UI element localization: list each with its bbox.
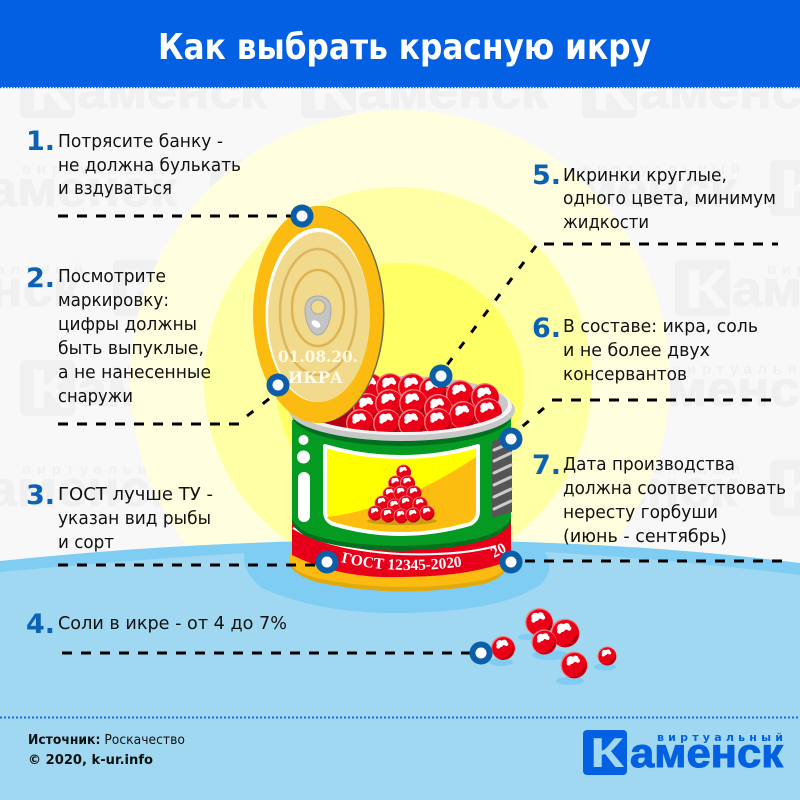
logo: аменск [630, 730, 783, 776]
source credit: Источник: Роскачество [28, 733, 185, 748]
callout 5: одного цвета, минимум [563, 188, 776, 209]
callout 1: 1. [26, 126, 55, 157]
callout 2: цифры должны [58, 314, 197, 335]
callout 3: и сорт [58, 532, 114, 553]
callout 2: быть выпуклые, [58, 338, 204, 359]
water surface [0, 540, 800, 800]
callout 7: 7. [532, 450, 561, 481]
can label [325, 446, 478, 534]
callout 7 [502, 450, 786, 570]
callout 7: Дата производства [563, 454, 735, 475]
can of caviar [289, 373, 515, 592]
band number: 20 [488, 540, 509, 562]
callout 5: Икринки круглые, [563, 165, 727, 186]
callout 5: 5. [532, 160, 561, 191]
band text: ГОСТ 12345-2020 [341, 552, 461, 570]
can rim [289, 376, 515, 446]
callout 6: консервантов [563, 364, 687, 385]
caviar in can [323, 373, 502, 432]
callout 2 [26, 263, 286, 424]
callout 7: должна соответствовать [563, 478, 786, 499]
lid caption: ИКРА [288, 368, 343, 387]
title: Как выбрать красную икру [158, 27, 651, 68]
callout 2: 2. [26, 263, 55, 294]
callout 1: и вздуваться [58, 178, 172, 199]
sun glow circles [130, 110, 670, 650]
loose caviar beads [489, 608, 617, 685]
footer divider [0, 716, 800, 718]
pull tab [305, 296, 331, 335]
callout 2: Посмотрите [58, 266, 166, 287]
callout 4: Соли в икре - от 4 до 7% [58, 613, 287, 634]
source credit [28, 733, 185, 768]
can base rim [289, 548, 510, 592]
callout 3: 3. [26, 480, 55, 511]
callout 7: нересту горбуши [563, 502, 718, 523]
can red band [292, 515, 511, 577]
callout 2: а не нанесенные [58, 362, 211, 383]
can lid [253, 206, 384, 423]
callout 5 [432, 160, 778, 384]
logo: К [590, 729, 624, 776]
watermark pattern [0, 59, 800, 520]
callout 1 [26, 126, 310, 224]
header bar [0, 0, 800, 88]
callout 7: (июнь - сентябрь) [563, 526, 727, 547]
callout 2: маркировку: [58, 290, 169, 311]
callout 5: жидкости [563, 212, 649, 233]
can green body [292, 420, 511, 551]
source credit: © 2020, k-ur.info [28, 753, 153, 768]
caviar pyramid [367, 464, 435, 524]
callout 3: ГОСТ лучше ТУ - [58, 484, 213, 505]
callout 6: 6. [532, 313, 561, 344]
band text path [341, 562, 490, 570]
callout 3 [26, 480, 336, 570]
callout 4 [26, 609, 490, 662]
can band white line [293, 528, 496, 554]
can highlights [297, 435, 310, 522]
callout 4: 4. [26, 609, 55, 640]
callout 1: не должна булькать [58, 155, 241, 176]
callout 6: В составе: икра, соль [563, 316, 758, 337]
callout 1: Потрясите банку - [58, 131, 223, 152]
callout 6 [502, 313, 772, 448]
callout 6: и не более двух [563, 340, 710, 361]
logo: виртуальный [657, 731, 783, 744]
can ribbed side [492, 432, 512, 518]
callout 2: снаружи [58, 386, 133, 407]
lid date: 01.08.20. [278, 347, 358, 366]
callout 3: указан вид рыбы [58, 508, 211, 529]
